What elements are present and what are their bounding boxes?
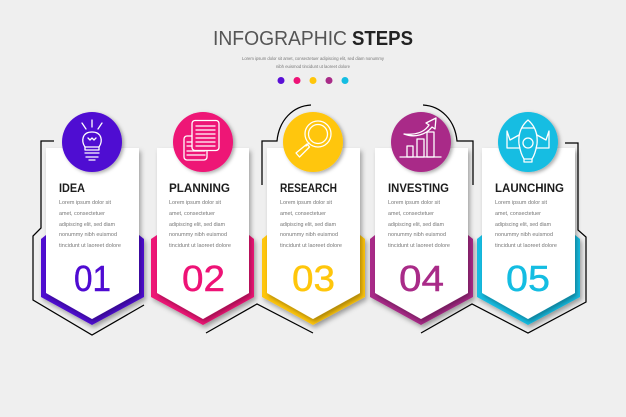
- card 4: [375, 148, 468, 319]
- body text 4: Lorem ipsum dolor sit: [388, 200, 441, 206]
- title: [213, 28, 413, 50]
- title: INFOGRAPHIC: [213, 28, 347, 50]
- circle 1: [62, 112, 122, 172]
- body text 2: [169, 200, 231, 249]
- body text 1: amet, consectetuer: [59, 211, 105, 217]
- heading: planning: PLANNING: [169, 182, 230, 195]
- number 05: 05: [506, 258, 550, 299]
- body text 2: Lorem ipsum dolor sit: [169, 200, 222, 206]
- connector line: steps 2 to 3: [206, 304, 313, 333]
- title: STEPS: [352, 28, 413, 50]
- connector line: arc above step 3: [262, 105, 311, 185]
- body text 5: adipiscing elit, sed diam: [495, 222, 551, 228]
- panel: step 3 research: [262, 112, 365, 325]
- body text 1: adipiscing elit, sed diam: [59, 222, 115, 228]
- heading: research: RESEARCH: [280, 182, 337, 195]
- card 3: [267, 148, 360, 319]
- band 2: [151, 235, 254, 325]
- heading: investing: INVESTING: [388, 182, 449, 195]
- body text 3: adipiscing elit, sed diam: [280, 222, 336, 228]
- heading: launching: LAUNCHING: [495, 182, 564, 195]
- connector line: arc above step 4: [423, 105, 473, 185]
- band 5: [477, 235, 580, 325]
- body text 3: nonummy nibh euismod: [280, 232, 338, 238]
- subtitle text: nibh euismod tincidunt ut laoreet dolore: [276, 64, 350, 69]
- body text 2: amet, consectetuer: [169, 211, 215, 217]
- body text 1: [59, 200, 121, 249]
- connector line: steps 4 to 5 and right side: [421, 143, 586, 333]
- number 01: 01: [74, 258, 111, 299]
- card 5: [482, 148, 575, 319]
- body text 3: amet, consectetuer: [280, 211, 326, 217]
- body text 4: amet, consectetuer: [388, 211, 434, 217]
- icon: light bulb: [82, 120, 102, 160]
- card 2: [157, 148, 249, 319]
- circle 2: [173, 112, 233, 172]
- icon: rising chart: [400, 118, 441, 157]
- number 03: 03: [292, 258, 335, 299]
- circle 3: [283, 112, 343, 172]
- body text 5: nonummy nibh euismod: [495, 232, 553, 238]
- icon: rocket: [507, 120, 549, 162]
- body text 5: Lorem ipsum dolor sit: [495, 200, 548, 206]
- subtitle text: [242, 56, 385, 69]
- body text 3: [280, 200, 342, 249]
- subtitle text: Lorem ipsum dolor sit amet, consectetuer adipiscing elit, sed diam nonummy: [242, 56, 385, 61]
- band 3: [262, 235, 365, 325]
- connector line: left of step 1: [33, 141, 144, 335]
- body text 4: nonummy nibh euismod: [388, 232, 446, 238]
- colour dots: [278, 77, 348, 84]
- icon: documents: [184, 120, 219, 160]
- body text 5: tincidunt ut laoreet dolore: [495, 243, 557, 249]
- body text 1: nonummy nibh euismod: [59, 232, 117, 238]
- panel: step 1 idea: [41, 112, 144, 325]
- circle 4: [391, 112, 451, 172]
- panel: step 2 planning: [151, 112, 254, 325]
- band 1: [41, 235, 144, 325]
- body text 4: adipiscing elit, sed diam: [388, 222, 444, 228]
- body text 2: nonummy nibh euismod: [169, 232, 227, 238]
- body text 3: tincidunt ut laoreet dolore: [280, 243, 342, 249]
- body text 4: tincidunt ut laoreet dolore: [388, 243, 450, 249]
- circle 5: [498, 112, 558, 172]
- body text 2: tincidunt ut laoreet dolore: [169, 243, 231, 249]
- band 4: [370, 235, 473, 325]
- panel: step 5 launching: [477, 112, 580, 325]
- body text 5: amet, consectetuer: [495, 211, 541, 217]
- icon: magnifying glass: [296, 121, 331, 157]
- body text 2: adipiscing elit, sed diam: [169, 222, 225, 228]
- heading: idea: IDEA: [59, 182, 86, 195]
- body text 3: Lorem ipsum dolor sit: [280, 200, 333, 206]
- body text 1: tincidunt ut laoreet dolore: [59, 243, 121, 249]
- panel: step 4 investing: [370, 112, 473, 325]
- number 02: 02: [182, 258, 225, 299]
- card 1: [46, 148, 139, 319]
- body text 4: [388, 200, 450, 249]
- body text 5: [495, 200, 557, 249]
- body text 1: Lorem ipsum dolor sit: [59, 200, 112, 206]
- number 04: 04: [399, 258, 444, 299]
